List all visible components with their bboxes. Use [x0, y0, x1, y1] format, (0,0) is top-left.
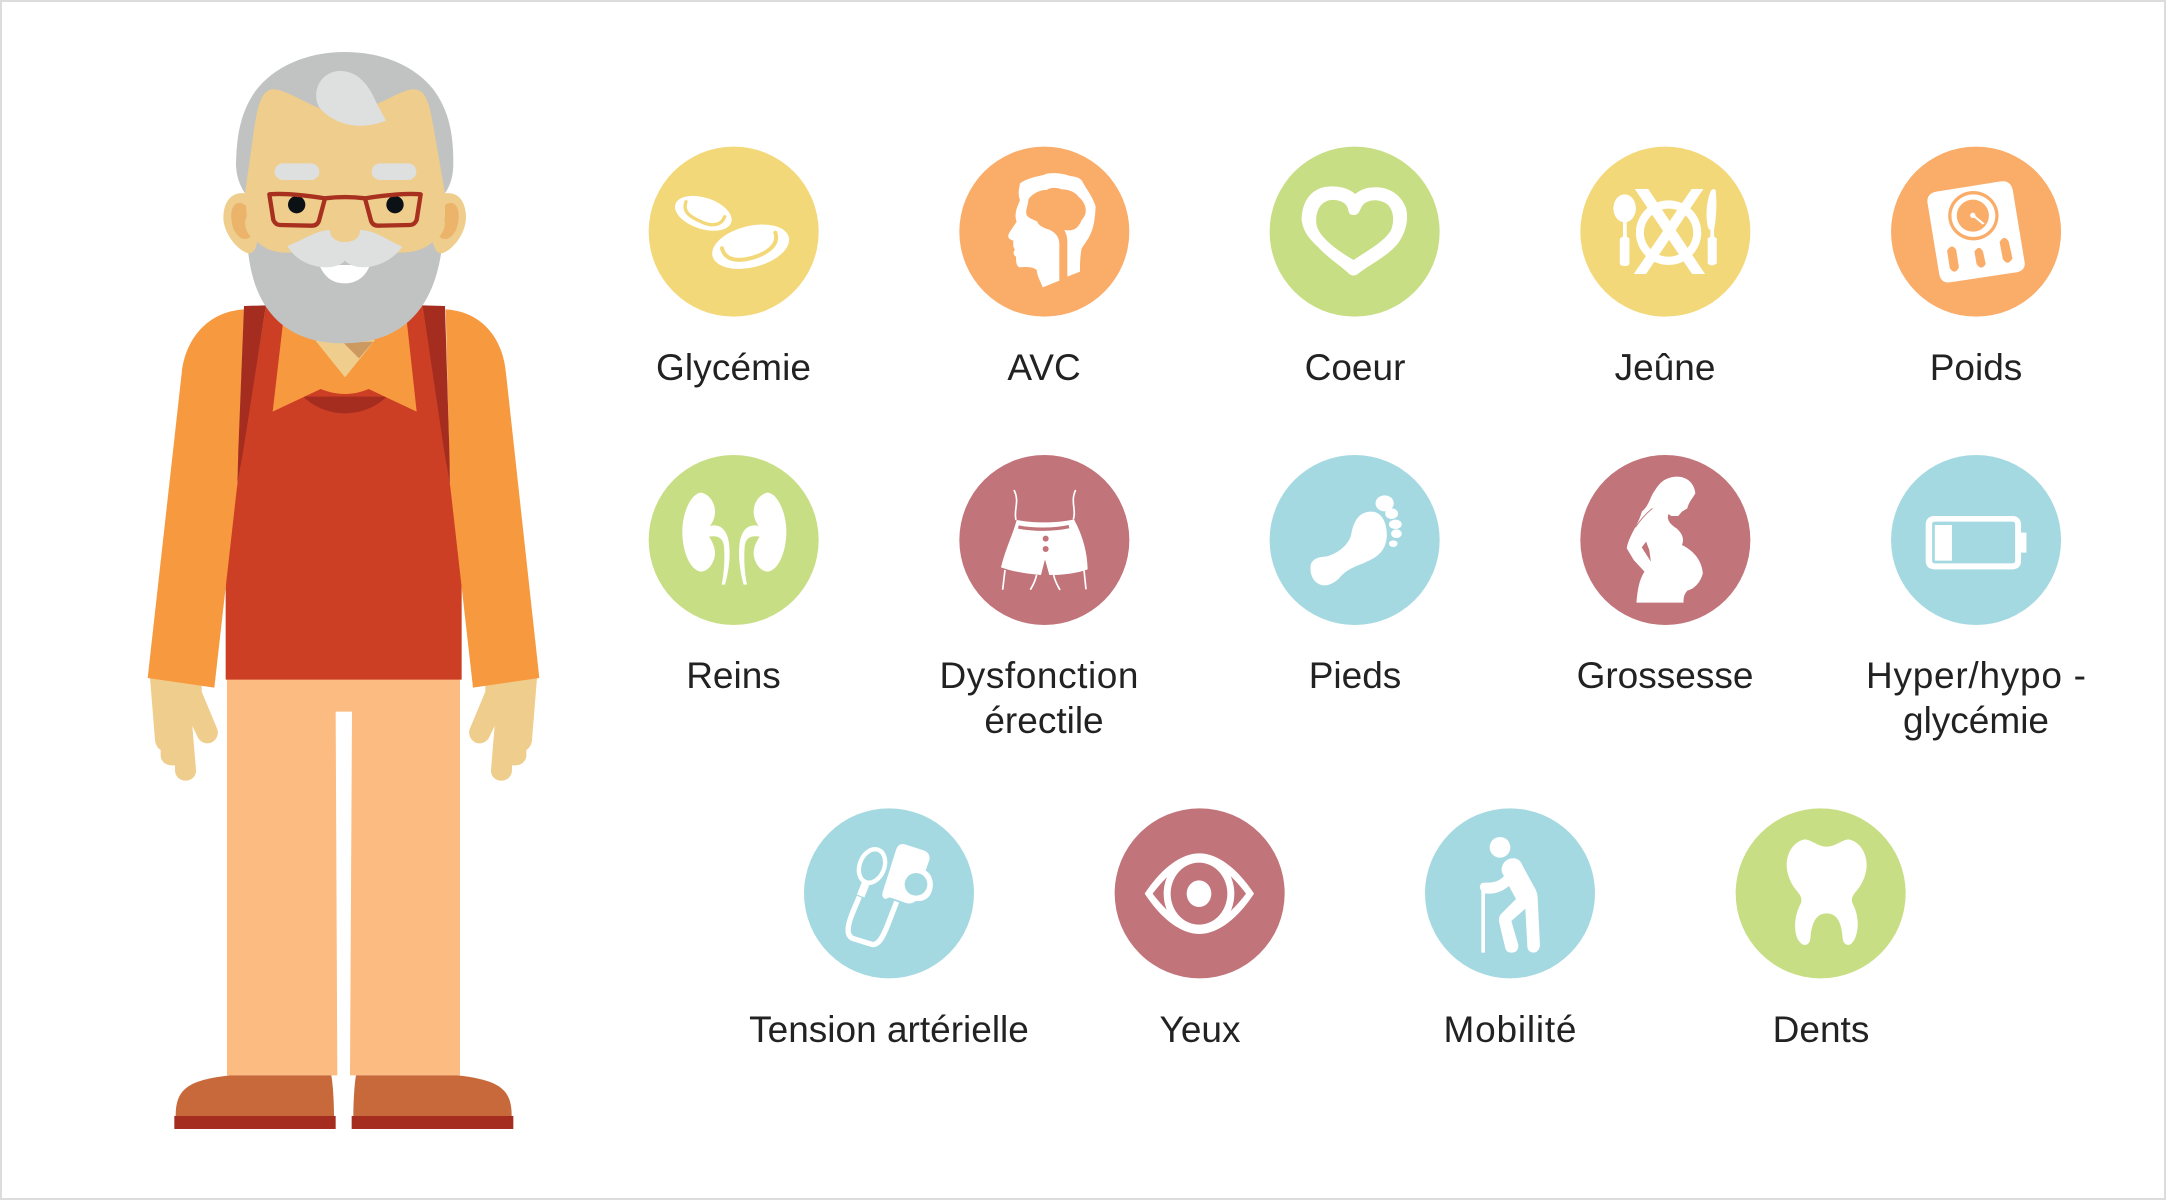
label: Pieds [1309, 655, 1401, 696]
icon: weighing scale [1891, 147, 2061, 317]
icon: footprint [1270, 455, 1440, 625]
shoes [174, 1075, 513, 1129]
item: Dysfonction érectile [940, 455, 1138, 741]
icon: boxer shorts [959, 455, 1129, 625]
item: Grossesse [1577, 455, 1753, 696]
hair back [236, 52, 453, 193]
label: glycémie [1903, 700, 2049, 741]
straps [237, 305, 450, 484]
icon: blood cells [649, 147, 819, 317]
label: Hyper/hypo - [1866, 655, 2086, 696]
label: Coeur [1305, 347, 1405, 388]
eyebrows [275, 163, 416, 180]
mouth [319, 265, 370, 283]
icon: tooth [1736, 808, 1906, 978]
label: Mobilité [1444, 1009, 1576, 1050]
label: Glycémie [656, 347, 811, 388]
icon: heart [1270, 147, 1440, 317]
eyes [288, 196, 404, 213]
label [1866, 655, 2086, 741]
item: Yeux [1115, 808, 1285, 1050]
beard [247, 240, 443, 343]
collar [273, 320, 417, 412]
icon: head and brain [959, 147, 1129, 317]
item: Coeur [1270, 147, 1440, 388]
label: AVC [1007, 347, 1081, 388]
label: Poids [1930, 347, 2022, 388]
sleeves [148, 309, 539, 688]
item: Tension artérielle [749, 808, 1029, 1050]
label: Dents [1773, 1009, 1869, 1050]
icon: pregnant woman [1580, 455, 1750, 625]
item: Dents [1736, 808, 1906, 1050]
item: AVC [959, 147, 1129, 388]
icon: person with cane [1425, 808, 1595, 978]
label: Dysfonction [940, 655, 1138, 696]
item: Jeûne [1580, 147, 1750, 388]
item: Reins [649, 455, 819, 696]
item: Poids [1891, 147, 2061, 388]
neck [315, 340, 375, 377]
label: Reins [686, 655, 781, 696]
item: Mobilité [1425, 808, 1595, 1050]
icon: kidneys [649, 455, 819, 625]
neckline [303, 397, 387, 413]
trousers [227, 677, 460, 1075]
item: Hyper/hypo-glycémie [1866, 455, 2086, 741]
item: Pieds [1270, 455, 1440, 696]
icon grid [649, 147, 2086, 1050]
glasses [269, 194, 421, 226]
label: Tension artérielle [749, 1009, 1029, 1050]
icon: low battery [1891, 455, 2061, 625]
label: Grossesse [1577, 655, 1753, 696]
face [245, 89, 445, 253]
icon: crossed plate and cutlery [1580, 147, 1750, 317]
label: Yeux [1160, 1009, 1241, 1050]
item: Glycémie [649, 147, 819, 388]
hair tuft [316, 71, 386, 126]
label: érectile [984, 700, 1104, 741]
label [940, 655, 1138, 741]
hands [150, 678, 537, 781]
icon: blood pressure cuff [804, 808, 974, 978]
icon: eye [1115, 808, 1285, 978]
illustration: elderly man [148, 52, 539, 1129]
vest [226, 305, 462, 680]
label: Jeûne [1615, 347, 1715, 388]
moustache [287, 230, 402, 267]
ears [223, 193, 466, 253]
